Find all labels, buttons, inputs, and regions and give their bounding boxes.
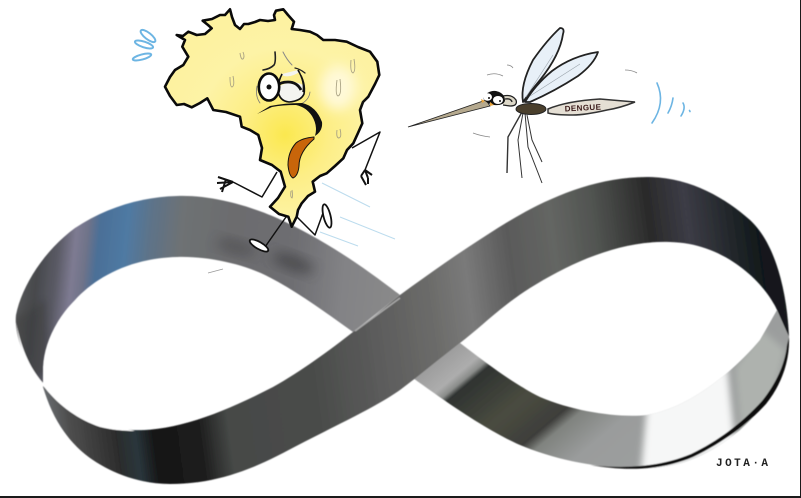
flight marks: [652, 83, 690, 123]
thorax: [516, 104, 546, 114]
character: running Brazil map: [165, 9, 380, 254]
head and eyes: [481, 91, 505, 106]
speed lines: [320, 183, 395, 246]
ribbon: crease highlight: [355, 298, 400, 331]
right eye, drooping: [277, 70, 304, 102]
abdomen label: DENGUE: [565, 103, 602, 113]
wings: [522, 28, 598, 102]
body highlight: [320, 66, 356, 110]
ribbon: bright rim on the left turn: [16, 322, 135, 431]
buzz marks: [473, 65, 637, 137]
sweat drops: [132, 28, 157, 62]
sweat beads on body: [230, 52, 355, 198]
ribbon: dark rim on the lower right turn: [590, 337, 789, 469]
eyebrows and creases: [256, 52, 310, 104]
ribbon: main diagonal band: [43, 177, 789, 484]
metal infinity ribbon: [0, 177, 801, 484]
ribbon: upper left band: [15, 195, 400, 383]
proboscis: [408, 100, 490, 127]
arms and legs: [217, 132, 380, 247]
neck ring: [503, 96, 516, 106]
character: dengue mosquito: [408, 28, 690, 183]
ribbon: lower right band: [414, 310, 790, 468]
mouth: [257, 103, 322, 136]
body: map of Brazil: [165, 9, 379, 227]
abdomen with label: [548, 99, 635, 115]
legs: [507, 112, 542, 183]
tongue: [288, 137, 314, 178]
shoes: [248, 204, 333, 254]
left eye: [259, 74, 279, 100]
stray mark: [208, 269, 223, 273]
signature: JOTA·A: [716, 458, 768, 470]
